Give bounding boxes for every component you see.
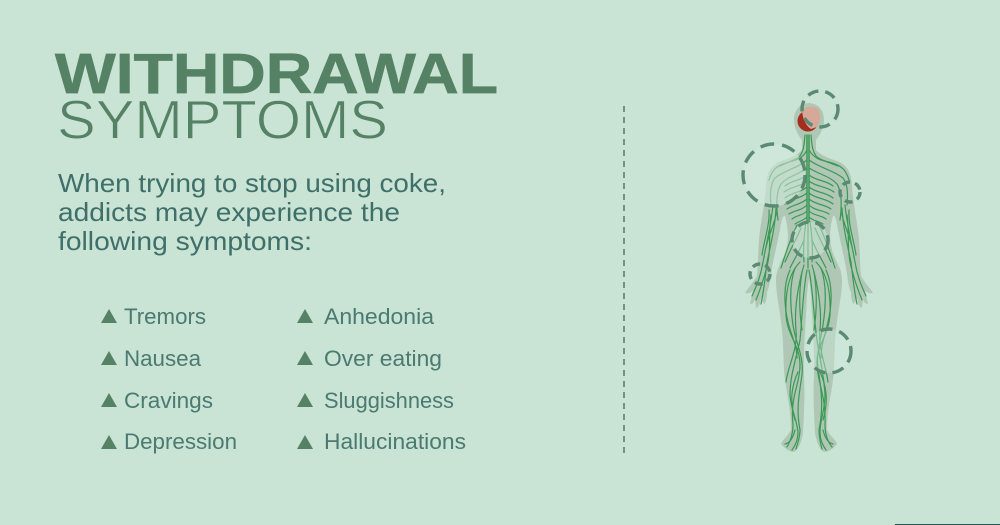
- highlighted symptom areas: [743, 91, 860, 373]
- icon: brain: [798, 107, 820, 132]
- intro text: When trying to stop using coke,: [58, 168, 446, 198]
- title: SYMPTOMS: [57, 88, 388, 150]
- symptom list: left column: Nausea: [124, 346, 202, 371]
- title: [55, 42, 498, 150]
- nerves: legs: [785, 262, 833, 450]
- symptom list: left column: Tremors: [124, 304, 206, 329]
- symptom list: right column: [297, 304, 466, 454]
- symptom list: right column: Sluggishness: [324, 388, 454, 413]
- symptom list: left column: [101, 304, 237, 454]
- symptom list: right column: Hallucinations: [324, 429, 466, 454]
- intro text: addicts may experience the: [58, 197, 400, 227]
- intro text: [58, 168, 446, 256]
- nerves: spine and trunk: [769, 135, 849, 268]
- intro text: following symptoms:: [58, 226, 312, 256]
- title: WITHDRAWAL: [55, 42, 498, 106]
- body figure with nervous system: [743, 91, 873, 452]
- body silhouette: [745, 103, 873, 452]
- symptom list: right column: Over eating: [324, 346, 442, 371]
- symptom list: left column: Depression: [124, 429, 237, 454]
- symptom list: left column: Cravings: [124, 388, 213, 413]
- nerves: arms: [752, 205, 866, 304]
- symptom list: right column: Anhedonia: [324, 304, 435, 329]
